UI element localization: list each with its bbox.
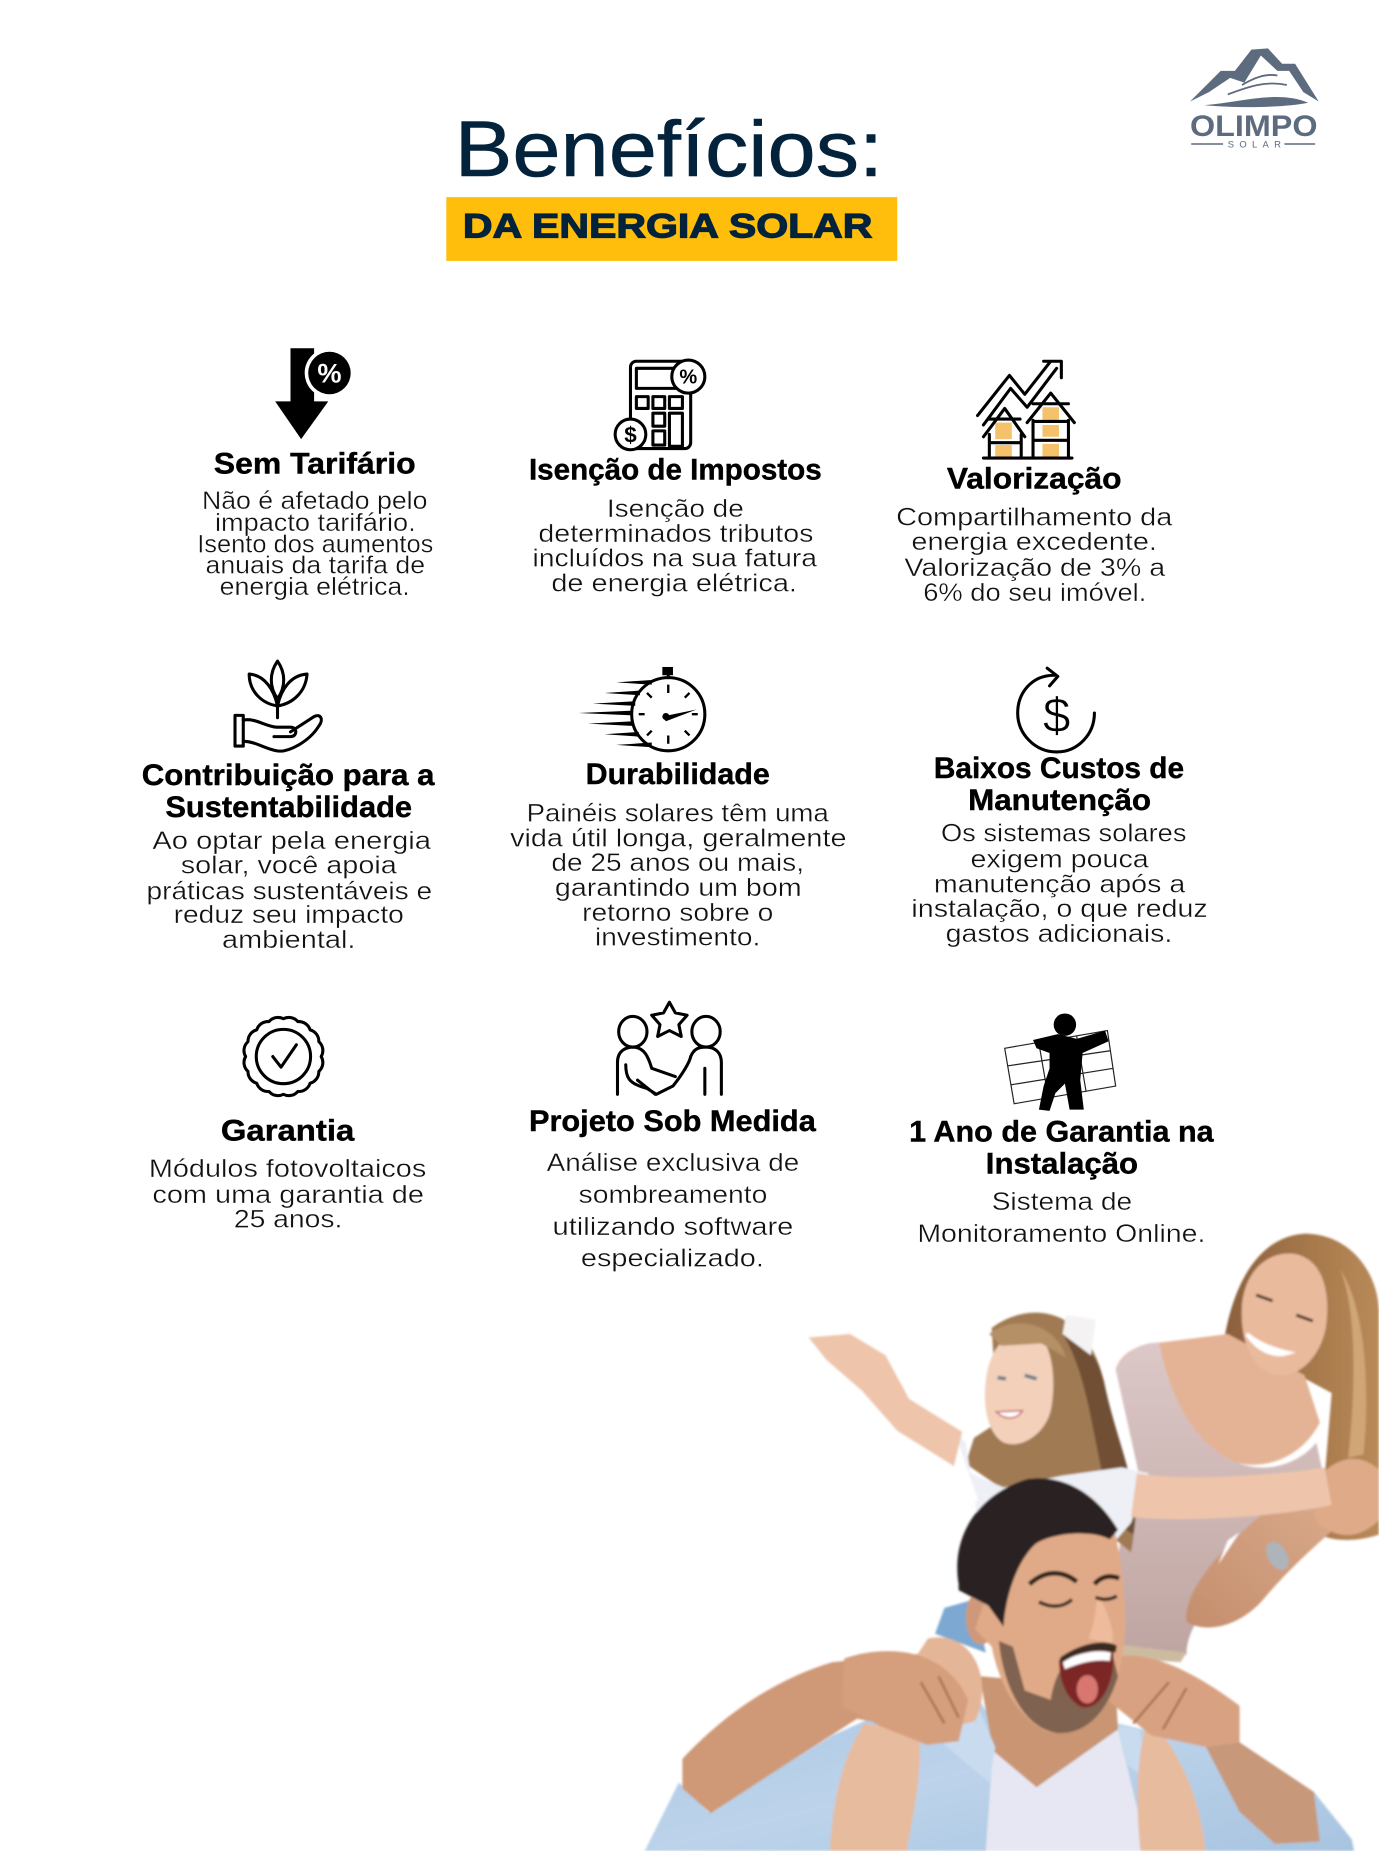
- text block: com uma garantia de: [152, 1181, 424, 1209]
- text block: [510, 800, 847, 952]
- text block: sombreamento: [579, 1181, 767, 1209]
- icon: badge with check: [244, 1017, 323, 1096]
- heading: [142, 759, 435, 824]
- title: Benefícios:: [455, 104, 883, 193]
- text block: Sistema de: [992, 1188, 1132, 1216]
- panel: Garantia: [149, 1017, 426, 1234]
- icon: hand with plant: [235, 661, 321, 751]
- text block: práticas sustentáveis e: [146, 878, 432, 906]
- text block: Compartilhamento da: [896, 503, 1173, 531]
- panel: Isenção de Impostos: [529, 360, 822, 597]
- text block: [896, 503, 1173, 607]
- icon: calculator: %: [679, 367, 697, 389]
- text block: vida útil longa, geralmente: [510, 824, 847, 852]
- text block: utilizando software: [553, 1213, 793, 1241]
- text block: investimento.: [595, 924, 760, 952]
- text block: de energia elétrica.: [551, 569, 797, 597]
- text block: Ao optar pela energia: [152, 827, 432, 855]
- photo: happy family: [645, 1234, 1379, 1851]
- text block: Monitoramento Online.: [917, 1220, 1205, 1248]
- text block: [532, 495, 818, 597]
- panel: Durabilidade: [510, 667, 847, 952]
- text block: Isenção de: [607, 495, 744, 523]
- man with girl's legs: [645, 1478, 1354, 1851]
- text block: 6% do seu imóvel.: [923, 579, 1146, 607]
- heading: Sem Tarifário: [214, 447, 416, 480]
- text block: Isento dos aumentos: [197, 530, 433, 558]
- text block: retorno sobre o: [582, 899, 773, 927]
- heading: Projeto Sob Medida: [529, 1105, 816, 1138]
- heading: Manutenção: [968, 784, 1151, 817]
- woman: [1116, 1234, 1379, 1662]
- panel: Contribuição para a Sustentabilidade: [142, 661, 435, 954]
- text block: energia excedente.: [911, 528, 1157, 556]
- text block: impacto tarifário.: [215, 509, 416, 537]
- text block: ambiental.: [222, 926, 355, 954]
- text block: Módulos fotovoltaicos: [149, 1155, 426, 1183]
- text block: Análise exclusiva de: [547, 1149, 799, 1177]
- icon: arrow down with percent: [275, 348, 354, 439]
- logo: Olimpo Solar: SOLAR: [1228, 140, 1281, 151]
- text block: exigem pouca: [970, 846, 1150, 874]
- text block: determinados tributos: [538, 520, 813, 548]
- subtitle banner: [446, 197, 897, 261]
- heading: Garantia: [221, 1114, 355, 1147]
- text block: incluídos na sua fatura: [532, 545, 818, 573]
- logo: Olimpo Solar: OLIMPO: [1190, 110, 1318, 143]
- text block: Valorização de 3% a: [904, 554, 1166, 582]
- text block: anuais da tarifa de: [206, 552, 425, 580]
- text block: energia elétrica.: [220, 573, 410, 601]
- icon: houses with rising arrow: [978, 361, 1074, 458]
- text block: [197, 487, 433, 601]
- text block: 25 anos.: [234, 1206, 342, 1234]
- icon: dollar cycle: $: [1043, 687, 1070, 743]
- panel: Sem Tarifário: [197, 348, 433, 601]
- icon: dollar cycle: [1018, 668, 1094, 752]
- text block: de 25 anos ou mais,: [551, 849, 804, 877]
- text block: instalação, o que reduz: [911, 895, 1208, 923]
- heading: [934, 752, 1184, 817]
- icon: calculator: $: [624, 423, 637, 448]
- panel: 1 Ano de Garantia na Instalação: [909, 1013, 1214, 1248]
- heading: Contribuição para a: [142, 759, 435, 792]
- heading: [909, 1116, 1214, 1180]
- heading: Valorização: [947, 463, 1122, 496]
- heading: Baixos Custos de: [934, 752, 1184, 785]
- girl: [809, 1313, 1332, 1570]
- text block: gastos adicionais.: [946, 920, 1172, 948]
- text block: manutenção após a: [934, 870, 1186, 898]
- text block: Painéis solares têm uma: [527, 800, 830, 828]
- heading: Instalação: [986, 1147, 1138, 1180]
- logo: Olimpo Solar: [1190, 48, 1319, 151]
- panel: Valorização: [896, 361, 1173, 607]
- text block: reduz seu impacto: [174, 901, 404, 929]
- icon: handshake with star: [617, 1002, 721, 1094]
- icon: calculator: [615, 360, 705, 450]
- heading: Sustentabilidade: [165, 791, 412, 824]
- text block: [547, 1149, 799, 1273]
- text block: [917, 1188, 1205, 1248]
- subtitle banner: DA ENERGIA SOLAR: [463, 207, 873, 245]
- text block: especializado.: [581, 1245, 764, 1273]
- heading: 1 Ano de Garantia na: [909, 1116, 1214, 1149]
- text block: Os sistemas solares: [941, 820, 1186, 848]
- icon: worker carrying solar panel: [1005, 1013, 1116, 1111]
- text block: garantindo um bom: [555, 874, 802, 902]
- text block: Não é afetado pelo: [202, 487, 427, 515]
- heading: Durabilidade: [586, 758, 770, 791]
- panel: Baixos Custos de Manutenção: [911, 668, 1208, 948]
- heading: Isenção de Impostos: [529, 453, 822, 486]
- text block: solar, você apoia: [181, 852, 398, 880]
- text block: [911, 820, 1208, 948]
- panel: Projeto Sob Medida: [529, 1002, 816, 1273]
- icon: stopwatch: [579, 667, 705, 751]
- text block: [149, 1155, 426, 1234]
- icon: arrow down with percent: %: [317, 357, 342, 388]
- text block: [146, 827, 432, 954]
